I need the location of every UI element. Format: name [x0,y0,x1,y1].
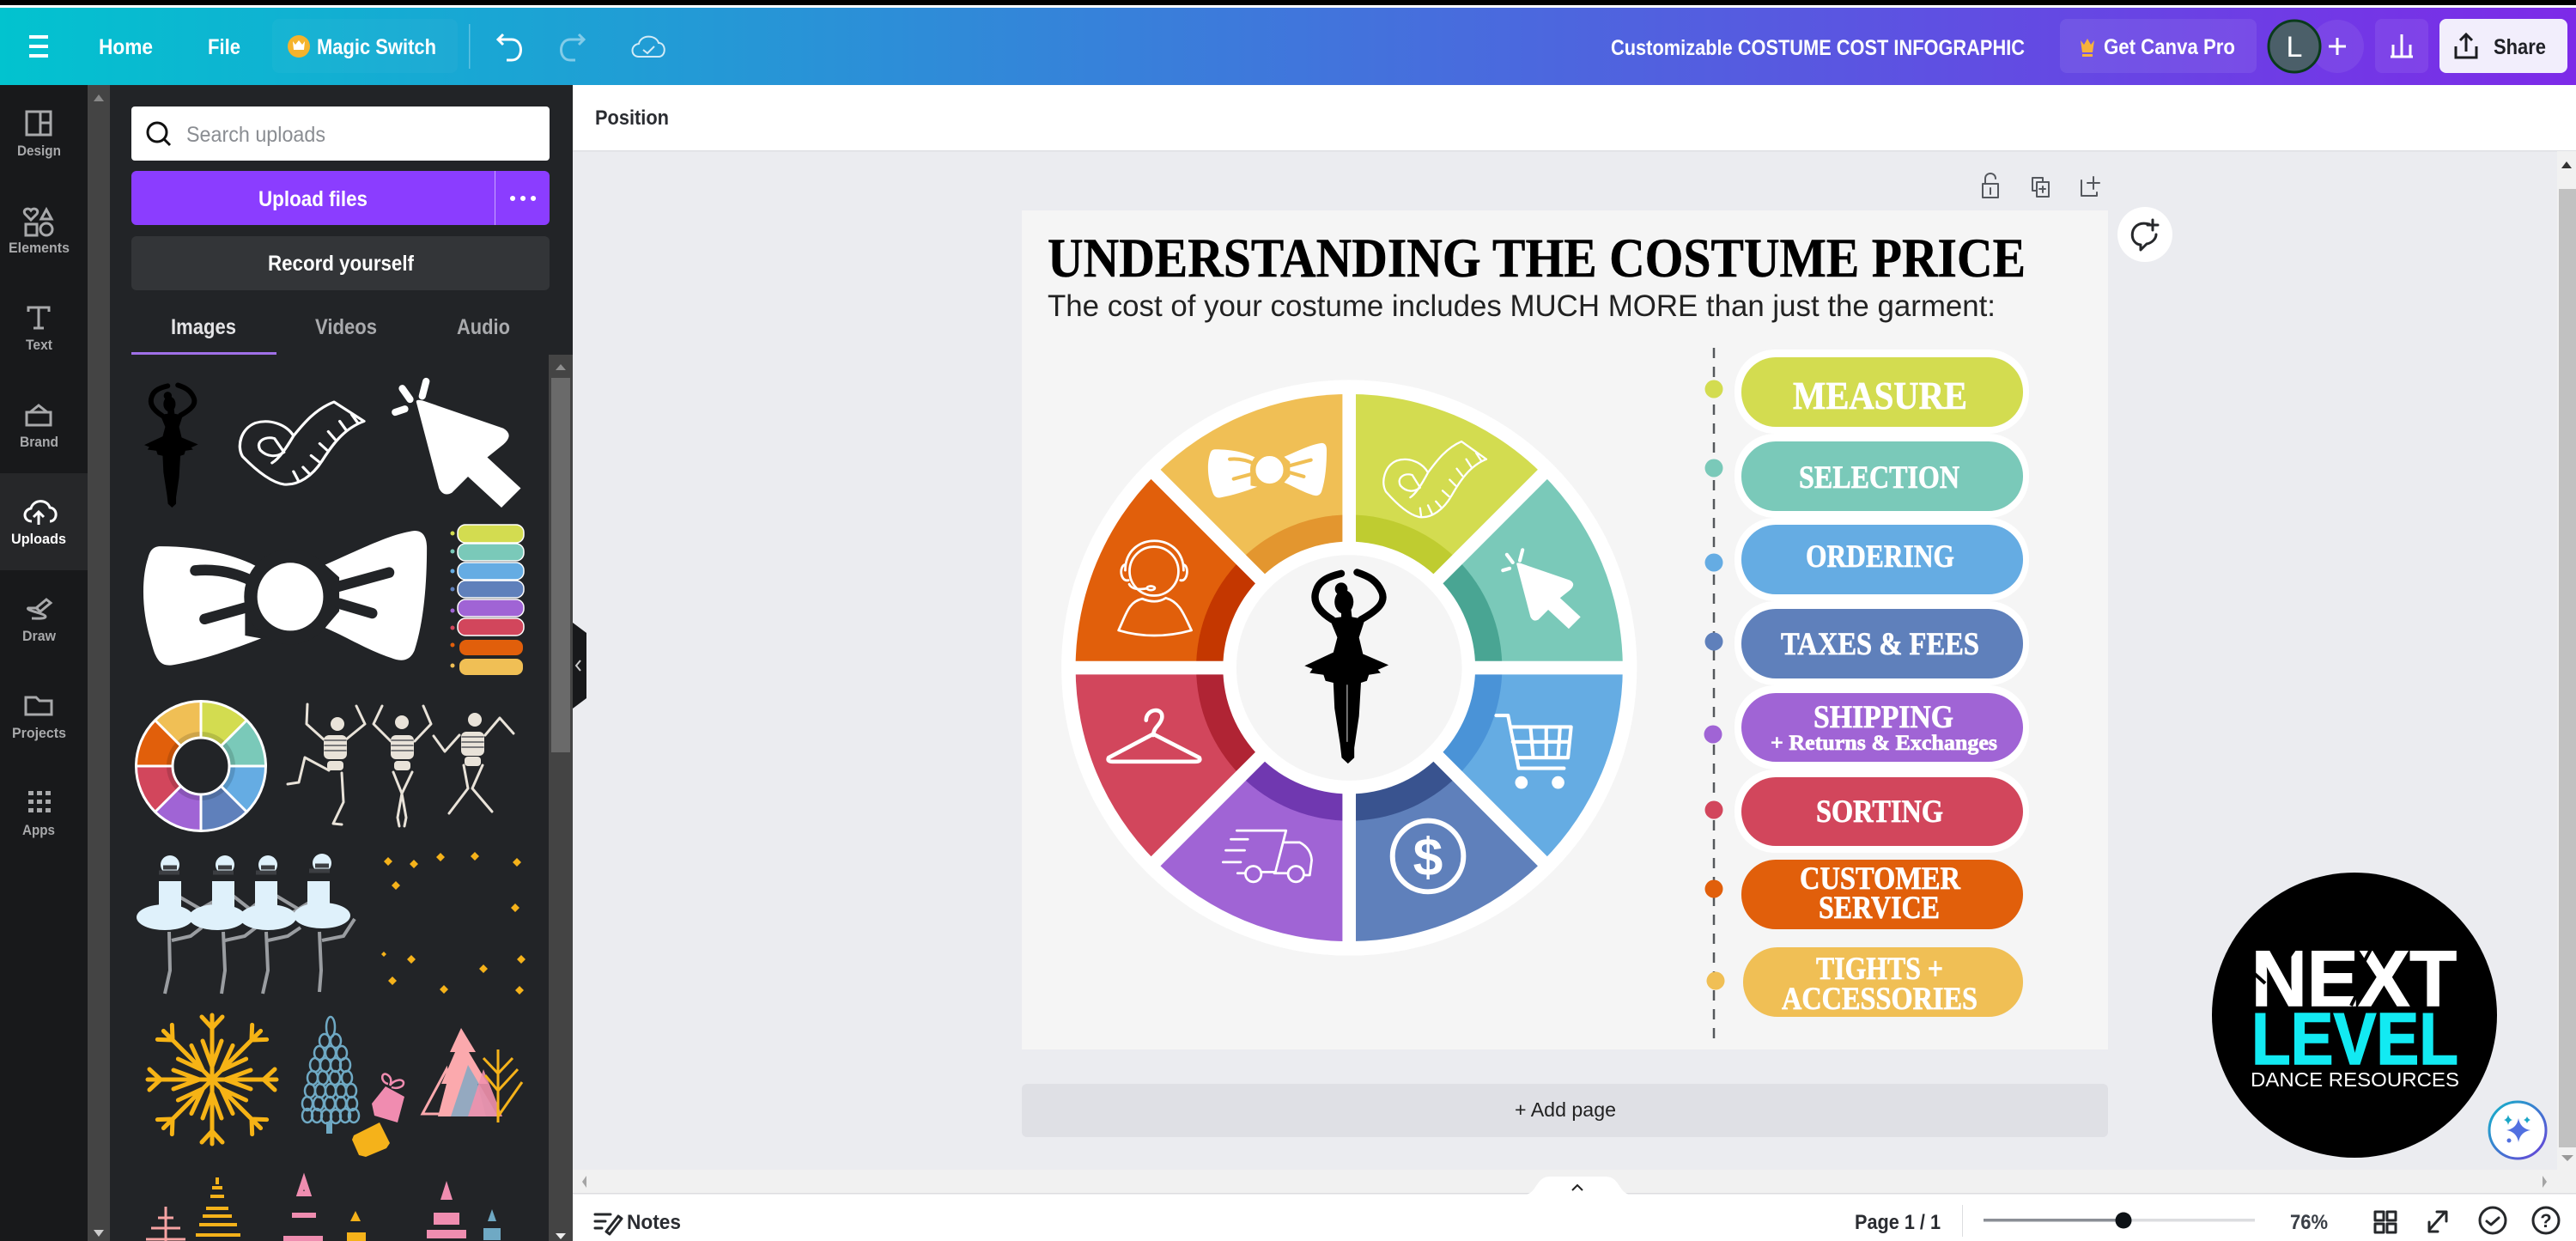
cloud saved icon [632,37,665,57]
uploads panel [110,85,573,1241]
share button: Share [2494,35,2546,59]
add page button: + Add page [1515,1098,1616,1121]
design tab: Design [17,143,61,159]
thumbnail: measuring tape [240,402,364,484]
zoom percent: 76% [2290,1211,2328,1234]
pill: tights and accessories: ACCESSORIES [1782,982,1978,1017]
dashed timeline [1704,348,1724,1039]
icon: help: ? [2540,1210,2552,1232]
search box: Search uploads [186,123,325,147]
next level logo: NEXT [2251,935,2457,1023]
magic switch button: Magic Switch [317,35,436,59]
thumbnail: gold sparkles [381,852,526,995]
top navigation bar [0,8,2576,85]
position toolbar [573,85,2576,151]
add collaborator button [2311,20,2364,73]
infographic page [1022,210,2108,1049]
segment: measure [1349,394,1542,668]
segment: shipping [1156,668,1349,941]
pill: customer service: SERVICE [1819,891,1940,926]
get canva pro button: Get Canva Pro [2104,35,2235,59]
draw tab: Draw [22,628,57,644]
panel collapse handle [573,623,586,709]
icon: cursor click [1503,550,1581,629]
thumbnail: mini wheel [135,700,267,832]
icon: hanger [1109,710,1200,762]
thumbnail: bottom row trees [146,1177,501,1241]
pill: taxes and fees [1735,601,2029,685]
panel scrollbar [549,355,573,1241]
upload files button [131,171,550,225]
icon: fullscreen [2429,1212,2446,1232]
position toolbar: Position [595,106,669,130]
design tab [17,112,61,159]
file link: File [208,35,240,59]
pill: shipping: + Returns & Exchanges [1771,732,1997,755]
search box [131,106,550,161]
segment: ordering [1349,668,1623,861]
brand tab: Brand [20,434,58,450]
magic assistant button [2489,1102,2546,1159]
thumbnail: dancing skeletons [288,704,513,826]
segment: customer service [1076,474,1349,668]
add page button [1022,1084,2108,1137]
icon: grid view [2375,1212,2396,1232]
segment: sorting [1076,668,1349,861]
uploads tab [11,502,66,547]
segment: tights and accessories [1156,394,1349,668]
apps tab [22,791,55,838]
magic switch button [272,19,458,73]
footer bar [573,1177,2576,1241]
icon: delivery truck [1223,830,1312,882]
text tab: Text [26,337,52,353]
pill: taxes and fees: TAXES & FEES [1781,627,1979,662]
pill: ordering: ORDERING [1806,539,1954,575]
document title: Customizable COSTUME COST INFOGRAPHIC [1611,36,2025,60]
menu icon [29,37,48,56]
subtitle: The cost of your costume includes MUCH MORE than just the garment: [1048,289,1996,323]
elements tab: Elements [9,240,70,256]
pill: shipping: SHIPPING [1814,700,1953,735]
elements tab [9,209,70,256]
page action icons [1983,173,2099,198]
title: UNDERSTANDING THE COSTUME PRICE [1048,228,2026,289]
thumbnail: snowflake [148,1015,276,1144]
icon: check status [2480,1208,2506,1233]
undo and redo icons [469,24,584,69]
next level logo [2212,873,2497,1158]
draw tab [22,599,57,644]
vertical scrollbar [2557,151,2576,1170]
collapse tab [1524,1177,1631,1195]
text tab [26,307,52,353]
pill: measure: MEASURE [1793,374,1967,417]
pill: tights and accessories: TIGHTS + [1816,952,1943,987]
notes [595,1211,681,1234]
icon: measuring tape [1383,441,1486,517]
thumbnail: blue tree with gifts [302,1017,404,1157]
thumbnail: cursor [395,381,520,508]
notes: Notes [627,1211,681,1234]
icon: help [2533,1208,2559,1233]
apps tab: Apps [22,822,55,838]
share button [2439,19,2567,73]
avatar: L [2287,31,2302,64]
pill: customer service: CUSTOMER [1800,861,1961,897]
tabs [131,315,510,355]
segment: taxes and fees [1349,668,1542,941]
cost wheel [1061,380,1637,956]
icon: dollar coin: $ [1413,827,1443,887]
horizontal scrollbar [573,1170,2576,1194]
icon: dollar coin [1393,821,1463,891]
segment: selection [1349,474,1623,668]
thumbnail: mini pill list [450,525,524,675]
upload files button: Upload files [258,187,368,211]
pill: selection: SELECTION [1799,460,1959,496]
next level logo: LEVEL [2251,999,2458,1080]
get canva pro button [2060,19,2257,73]
next level logo: DANCE RESOURCES [2251,1068,2459,1091]
tabs: Audio [457,315,510,339]
pill: sorting: SORTING [1816,794,1943,830]
record yourself button: Record yourself [268,252,415,276]
page counter: Page 1 / 1 [1855,1211,1941,1234]
uploads tab: Uploads [11,531,66,547]
pill: measure [1735,350,2029,434]
projects tab [12,697,66,741]
icon: headset agent [1119,541,1192,636]
thumbnail: ballerina [144,385,198,508]
avatar [2269,21,2320,72]
pill: selection [1735,434,2029,518]
icon: shopping cart [1496,715,1571,788]
projects tab: Projects [12,725,66,741]
add comment button [2117,207,2172,262]
home link: Home [99,35,153,59]
tabs: Videos [315,315,377,339]
icon: bow tie [1208,443,1327,497]
timeline dots [1704,380,1724,989]
tabs: Images [171,315,236,339]
thumbnail: bow [143,531,427,666]
analytics button [2375,19,2428,73]
thumbnail: skeleton ballerinas [137,854,355,994]
pill: ordering [1735,518,2029,601]
icon: ballerina silhouette [1304,572,1388,763]
pill: tights and accessories [1743,947,2023,1017]
left icon rail [0,85,110,1241]
pill: sorting [1735,770,2029,853]
thumbnail: pink and gold trees [422,1028,522,1122]
pill: customer service [1741,860,2023,929]
zoom slider [1984,1213,2255,1228]
brand tab [20,405,58,450]
pill: shipping [1735,685,2029,770]
record yourself button [131,236,550,290]
